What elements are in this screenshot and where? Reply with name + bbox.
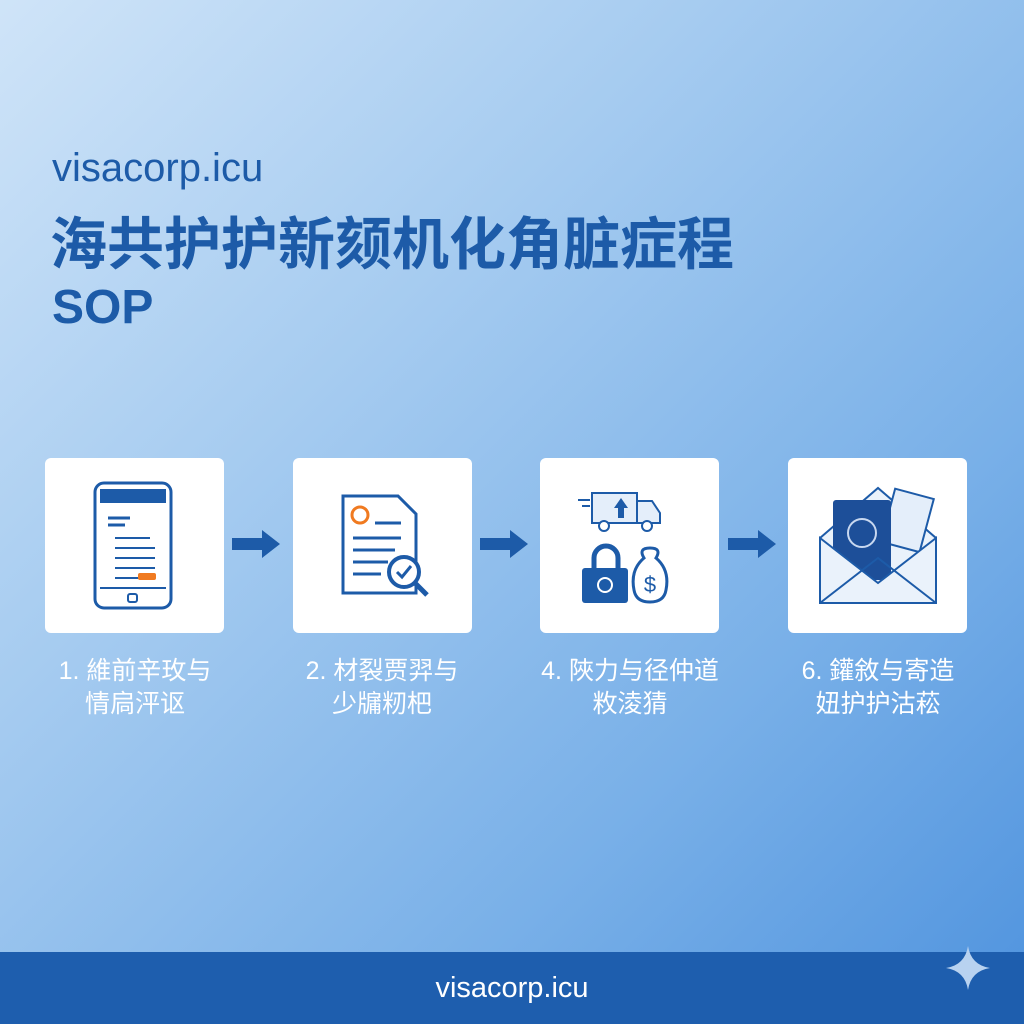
footer: visacorp.icu	[435, 972, 589, 1004]
text: 妞护护沽菘	[815, 690, 940, 718]
card 1: phone	[45, 458, 224, 633]
card 4: envelope with passport	[788, 458, 967, 633]
step labels: 1. 維前辛玫与	[59, 657, 211, 685]
card 3: truck, lock, money	[540, 458, 719, 633]
arrow 3	[728, 530, 776, 558]
icon: sparkle	[946, 946, 990, 990]
title: 海共护护新颏机化角脏症程	[50, 213, 734, 277]
text: 2. 材裂贾羿与	[306, 657, 458, 685]
card 2: document	[293, 458, 472, 633]
arrow 2	[480, 530, 528, 558]
step labels: 情扃泙讴	[85, 690, 185, 718]
arrow 1	[232, 530, 280, 558]
title	[50, 213, 734, 334]
card 3: truck, lock, money: $	[644, 572, 656, 597]
site name: visacorp.icu	[52, 146, 263, 190]
text: 敉淩猜	[592, 690, 668, 718]
title: SOP	[52, 281, 153, 334]
footer	[0, 952, 1024, 1024]
text: 6. 鑵敘与寄造	[802, 657, 954, 685]
text: 少牖籾杷	[332, 690, 432, 718]
step labels	[59, 657, 211, 718]
text: 4. 陜力与径仲道	[541, 657, 719, 685]
